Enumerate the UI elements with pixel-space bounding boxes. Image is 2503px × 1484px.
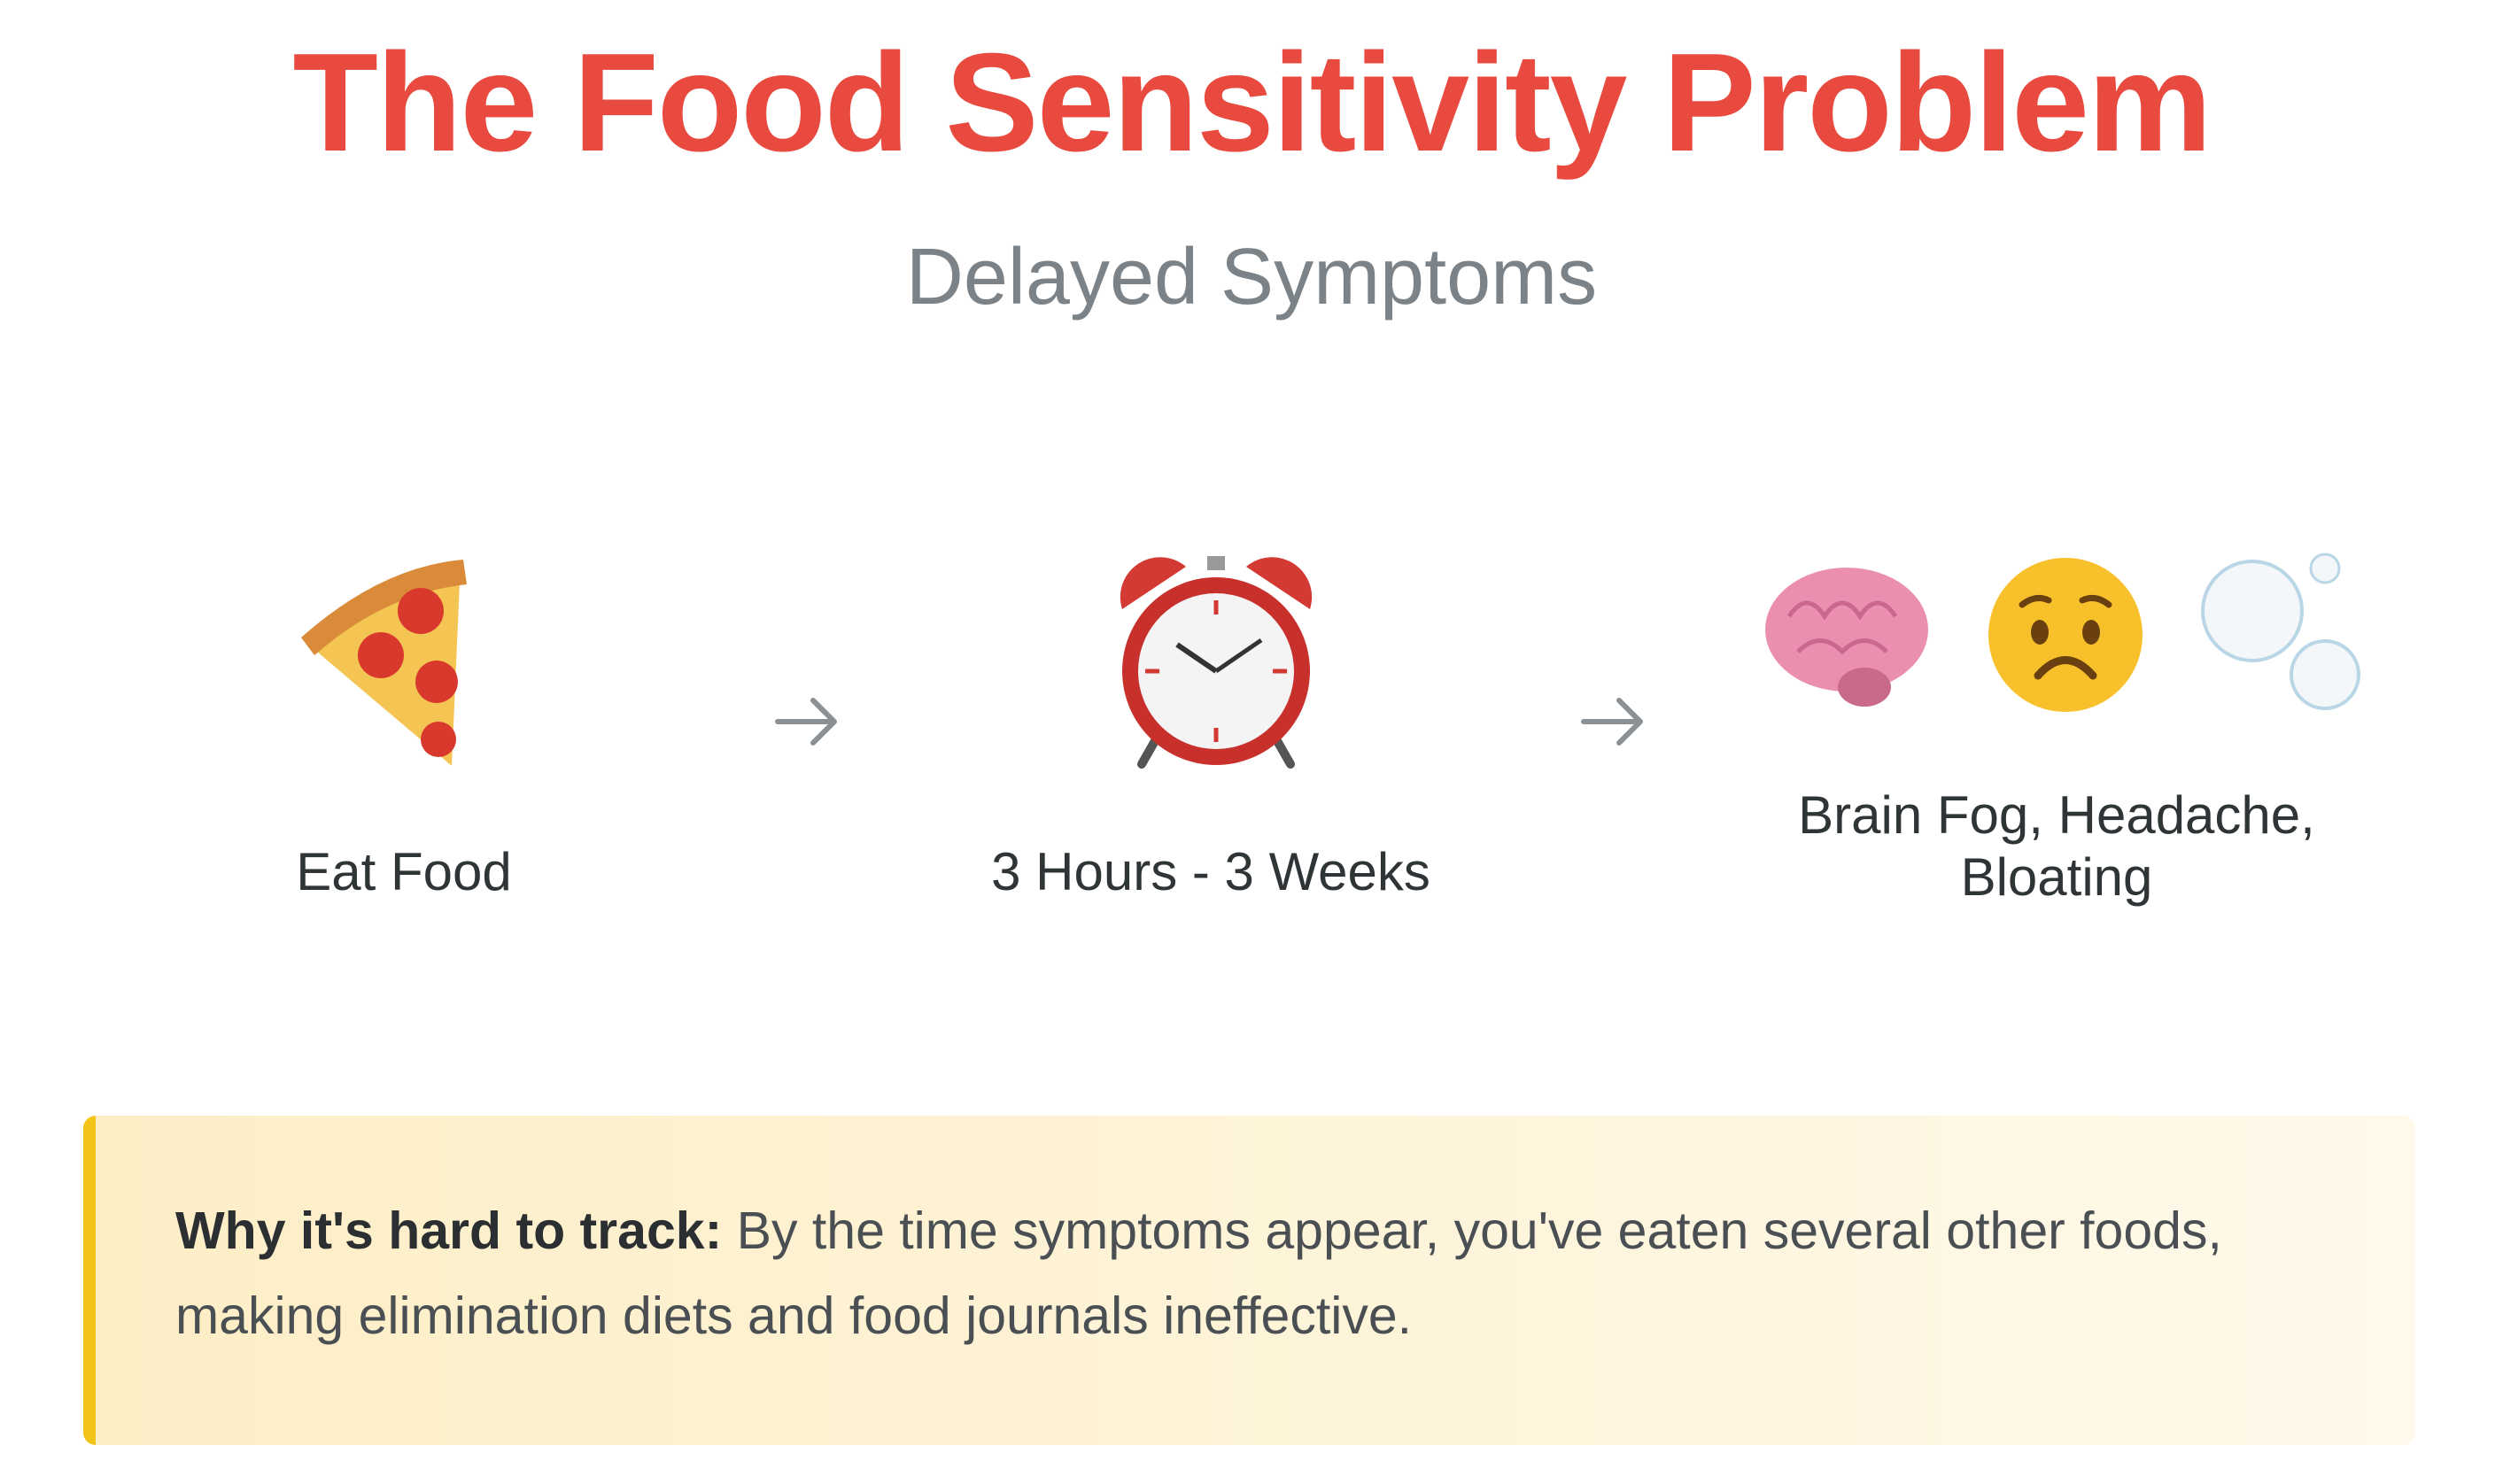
subtitle: Delayed Symptoms <box>906 233 1597 321</box>
callout text <box>175 1202 2222 1345</box>
callout <box>83 1116 2415 1445</box>
title: The Food Sensitivity Problem <box>292 25 2211 181</box>
icon: alarm clock <box>1120 556 1313 769</box>
icon: brain <box>1765 568 1928 707</box>
label: symptoms: Bloating <box>1961 847 2152 907</box>
icon: pizza <box>301 560 467 766</box>
callout text: making elimination diets and food journals ineffective. <box>175 1287 1412 1345</box>
icon: worried face <box>1988 558 2143 712</box>
label: eat food: Eat Food <box>296 842 512 901</box>
arrow 1 <box>775 698 837 746</box>
callout text: Why it's hard to track: By the time symptoms appear, you've eaten several other foods, <box>175 1202 2222 1260</box>
label: time: 3 Hours - 3 Weeks <box>991 842 1430 901</box>
icon: bubbles <box>2201 553 2360 710</box>
label: symptoms <box>1798 785 2315 907</box>
label: symptoms: Brain Fog, Headache, <box>1798 785 2315 845</box>
arrow 2 <box>1581 698 1643 746</box>
